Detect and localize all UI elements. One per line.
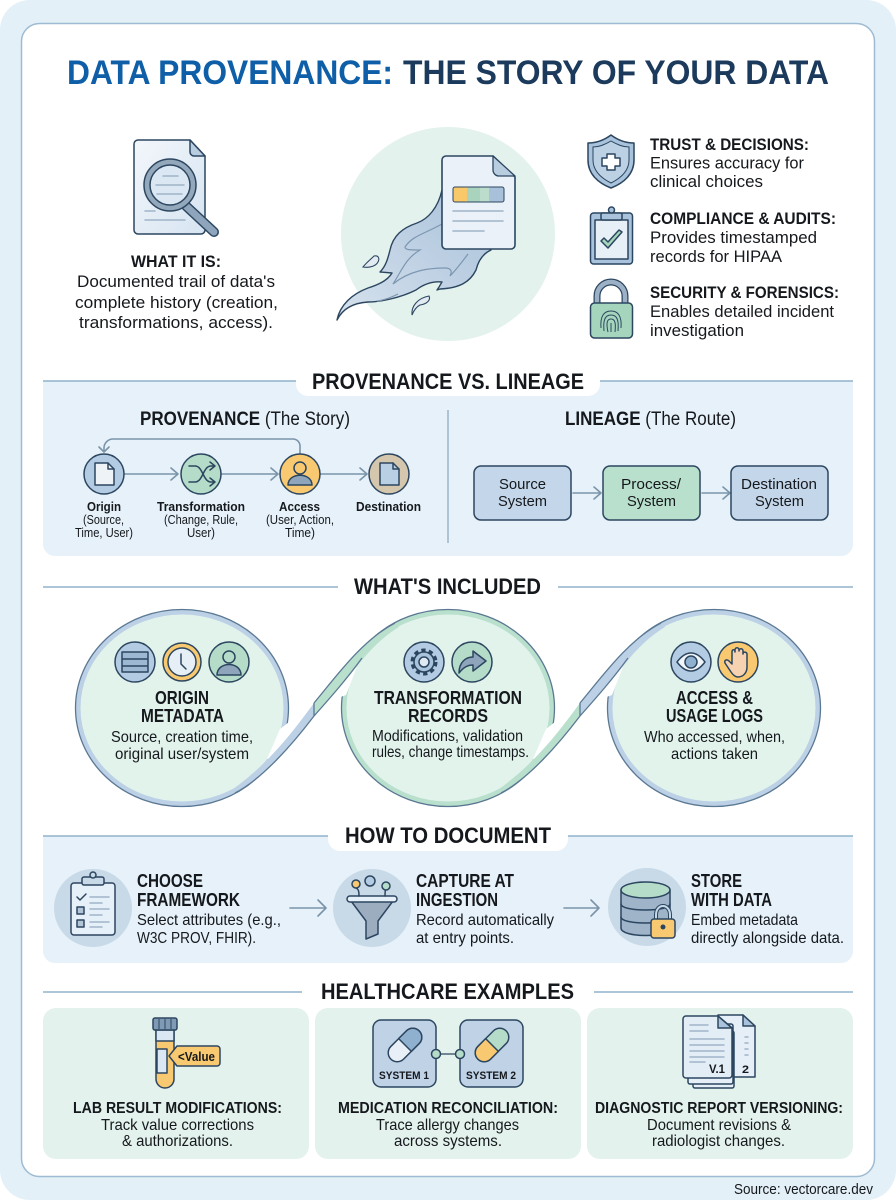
text: trust and decisions: TRUST & DECISIONS: bbox=[650, 136, 809, 154]
box: source system: Source bbox=[499, 476, 546, 493]
blob: access and usage logs: Who accessed, when, bbox=[644, 729, 785, 746]
heading: what's included: WHAT'S INCLUDED bbox=[354, 574, 541, 599]
icon: database with lock bbox=[608, 868, 686, 946]
text: what it is: transformations, access). bbox=[79, 313, 273, 332]
step: capture at ingestion: Record automatically bbox=[416, 912, 554, 929]
node: destination bbox=[356, 454, 421, 514]
text: compliance and audits: records for HIPAA bbox=[650, 247, 783, 266]
blob: origin metadata bbox=[76, 610, 288, 806]
step: capture at ingestion bbox=[333, 869, 554, 947]
card: lab result modifications: & authorizations. bbox=[122, 1133, 233, 1150]
text: trust and decisions: clinical choices bbox=[650, 172, 763, 191]
step: capture at ingestion: CAPTURE AT bbox=[416, 871, 514, 891]
blob: origin metadata: METADATA bbox=[141, 706, 224, 726]
box: source system: System bbox=[498, 493, 547, 510]
subheading: provenance: PROVENANCE (The Story) bbox=[140, 409, 350, 430]
step: store with data bbox=[608, 868, 844, 947]
node: destination: Destination bbox=[356, 499, 421, 514]
icon: padlock with fingerprint bbox=[590, 282, 632, 338]
icon: server bbox=[115, 642, 155, 682]
icon: hand bbox=[718, 642, 758, 682]
text: trust and decisions: Ensures accuracy for bbox=[650, 154, 804, 172]
card: lab result modifications: LAB RESULT MODIFICATIONS: bbox=[73, 1100, 282, 1117]
arrow bbox=[564, 900, 599, 916]
source credit: Source: vectorcare.dev bbox=[734, 1181, 873, 1198]
icon: stacked documents: 2 bbox=[742, 1064, 749, 1076]
icon: clipboard check bbox=[590, 207, 632, 264]
arrows: flow bbox=[124, 468, 367, 480]
step: choose framework: CHOOSE bbox=[137, 871, 203, 891]
box: process system bbox=[603, 466, 700, 520]
blob: transformation records: Modifications, validation bbox=[372, 728, 523, 745]
card: diagnostic report versioning: radiologist changes. bbox=[652, 1133, 785, 1150]
icon: system 1 pill bbox=[373, 1020, 436, 1087]
node: access bbox=[266, 454, 334, 540]
lineage flow bbox=[474, 409, 828, 520]
icon: flame trail bbox=[337, 190, 491, 320]
node: origin: (Source, bbox=[83, 513, 124, 527]
node: transformation: Transformation bbox=[157, 499, 245, 514]
box: process system: Process/ bbox=[621, 476, 682, 493]
arrow bbox=[573, 487, 601, 499]
blob: access and usage logs: ACCESS & bbox=[676, 688, 753, 708]
arrow bbox=[702, 487, 730, 499]
card: medication reconciliation bbox=[315, 1008, 581, 1159]
step: choose framework: W3C PROV, FHIR). bbox=[137, 930, 256, 947]
panel: provenance vs lineage bbox=[43, 362, 853, 556]
central illustration: document with flowing trail bbox=[337, 127, 555, 341]
icon: shield bbox=[588, 135, 634, 188]
text: what it is: Documented trail of data's bbox=[77, 272, 275, 291]
box: destination system: Destination bbox=[741, 476, 817, 493]
step: choose framework bbox=[54, 869, 281, 947]
what it is block bbox=[75, 140, 278, 332]
text: security and forensics: Enables detailed incident bbox=[650, 302, 834, 321]
icon: stacked documents: V.1 bbox=[709, 1064, 726, 1076]
card: medication reconciliation: MEDICATION RECONCILIATION: bbox=[338, 1100, 558, 1117]
blob: transformation records bbox=[342, 610, 554, 806]
text: compliance and audits bbox=[650, 210, 836, 266]
heading: healthcare examples: HEALTHCARE EXAMPLES bbox=[321, 979, 574, 1004]
icon: clock bbox=[163, 643, 201, 681]
node: transformation: User) bbox=[187, 526, 215, 540]
icon: stacked documents bbox=[683, 1015, 755, 1088]
card: lab result modifications: Track value corrections bbox=[101, 1117, 254, 1134]
icon: test tube with value tag bbox=[153, 1018, 220, 1088]
box: destination system bbox=[731, 466, 828, 520]
box: destination system: System bbox=[755, 493, 804, 510]
card: diagnostic report versioning bbox=[587, 1008, 853, 1159]
step: store with data: WITH DATA bbox=[691, 890, 772, 910]
blob: origin metadata: original user/system bbox=[115, 746, 249, 763]
icon: funnel bbox=[333, 869, 411, 947]
step: choose framework: Select attributes (e.g., bbox=[137, 912, 281, 929]
card: diagnostic report versioning: Document revisions & bbox=[647, 1117, 791, 1134]
node: access: Access bbox=[279, 499, 320, 514]
icon: system 1 pill: SYSTEM 1 bbox=[379, 1070, 429, 1082]
icon: droplets bbox=[363, 256, 430, 315]
text: what it is: complete history (creation, bbox=[75, 293, 278, 312]
node: transformation: (Change, Rule, bbox=[164, 513, 238, 527]
blob: origin metadata: ORIGIN bbox=[155, 688, 209, 708]
text: what it is bbox=[75, 252, 278, 332]
what's included chain bbox=[76, 610, 820, 806]
provenance flow bbox=[75, 409, 421, 540]
icon: eye bbox=[671, 642, 711, 682]
title bbox=[67, 54, 829, 92]
title: THE STORY OF YOUR DATA bbox=[403, 54, 829, 92]
step: capture at ingestion: at entry points. bbox=[416, 930, 514, 947]
icon: gear bbox=[404, 642, 444, 682]
node: origin bbox=[75, 454, 133, 540]
panel: how to document bbox=[43, 816, 853, 963]
step: store with data: Embed metadata bbox=[691, 912, 798, 929]
node: access: Time) bbox=[285, 526, 315, 540]
blob: transformation records: rules, change timestamps. bbox=[372, 744, 529, 761]
heading: how to document: HOW TO DOCUMENT bbox=[345, 823, 552, 848]
subheading: lineage: LINEAGE (The Route) bbox=[565, 409, 736, 430]
icon: document with magnifier bbox=[134, 140, 214, 234]
card: medication reconciliation: Trace allergy changes bbox=[376, 1117, 519, 1134]
blob: access and usage logs: USAGE LOGS bbox=[666, 706, 763, 726]
heading: provenance vs lineage: PROVENANCE VS. LINEAGE bbox=[312, 369, 584, 394]
step: store with data: STORE bbox=[691, 871, 742, 891]
text: compliance and audits: Provides timestamped bbox=[650, 228, 817, 247]
step: choose framework: FRAMEWORK bbox=[137, 890, 240, 910]
step: store with data: directly alongside data. bbox=[691, 930, 844, 947]
box: process system: System bbox=[627, 493, 676, 510]
text: what it is: WHAT IT IS: bbox=[131, 252, 221, 271]
card: medication reconciliation: across systems. bbox=[394, 1133, 502, 1150]
icon: user bbox=[209, 642, 249, 682]
blob: access and usage logs: actions taken bbox=[671, 746, 758, 763]
icon: forward arrow bbox=[452, 642, 492, 682]
text: compliance and audits: COMPLIANCE & AUDITS: bbox=[650, 210, 836, 228]
icon: checklist bbox=[54, 869, 132, 947]
node: transformation bbox=[157, 454, 245, 540]
icon: system 2 pill: SYSTEM 2 bbox=[466, 1070, 516, 1082]
box: source system bbox=[474, 466, 571, 520]
blob: transformation records: TRANSFORMATION bbox=[374, 688, 522, 708]
benefits list bbox=[588, 135, 839, 340]
blob: origin metadata: Source, creation time, bbox=[111, 729, 253, 746]
card: lab result modifications bbox=[43, 1008, 309, 1159]
text: security and forensics: investigation bbox=[650, 321, 744, 340]
icon: flame swirls bbox=[377, 224, 468, 301]
icon: document bbox=[442, 156, 515, 249]
icon: test tube with value tag: <Value bbox=[178, 1049, 215, 1064]
arrow: feedback loop bbox=[99, 439, 300, 454]
icon: system 2 pill bbox=[460, 1020, 523, 1087]
arrow bbox=[290, 900, 326, 916]
node: access: (User, Action, bbox=[266, 513, 334, 527]
text: trust and decisions bbox=[650, 136, 809, 191]
node: origin: Time, User) bbox=[75, 526, 133, 540]
step: capture at ingestion: INGESTION bbox=[416, 890, 498, 910]
title: DATA PROVENANCE: bbox=[67, 54, 393, 92]
connector between systems bbox=[432, 1050, 464, 1058]
blob: transformation records: RECORDS bbox=[408, 706, 488, 726]
connector ribbon: transformation to access bbox=[498, 623, 665, 793]
white gaps beside the ribbons bbox=[267, 659, 626, 759]
blob: access and usage logs bbox=[608, 610, 820, 806]
connector ribbon: origin to transformation bbox=[232, 623, 399, 793]
node: origin: Origin bbox=[87, 499, 121, 514]
card: diagnostic report versioning: DIAGNOSTIC REPORT VERSIONING: bbox=[595, 1100, 843, 1117]
text: security and forensics bbox=[650, 284, 839, 340]
text: security and forensics: SECURITY & FORENSICS: bbox=[650, 284, 839, 302]
